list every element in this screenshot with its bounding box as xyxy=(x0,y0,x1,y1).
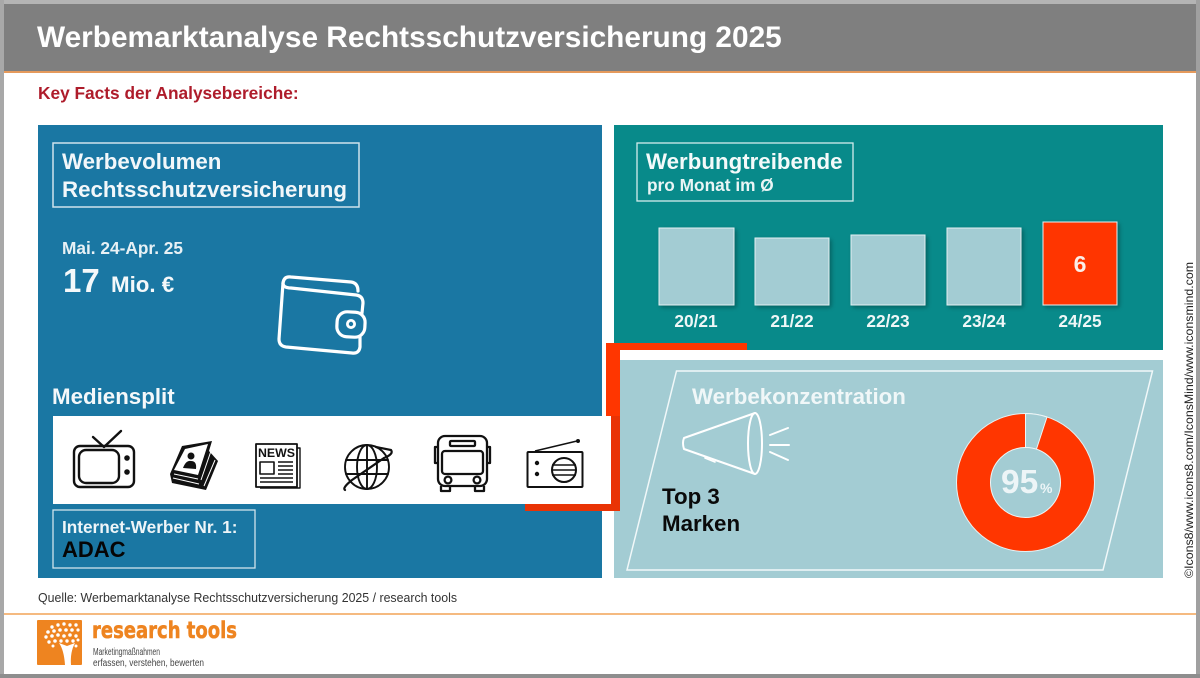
parallelogram frame xyxy=(627,371,1152,570)
icon: megaphone xyxy=(683,413,789,474)
heading: Werbekonzentration: Werbekonzentration xyxy=(692,384,906,409)
bar chart: advertisers per month: 6 xyxy=(1074,251,1086,277)
icon: newspaper: NEWS xyxy=(258,446,295,460)
logo: research tools xyxy=(37,618,237,669)
heading box: Werbevolumen xyxy=(53,143,359,207)
icon: magazine xyxy=(170,441,218,490)
value: 17 Mio. euro: 17 xyxy=(63,262,100,299)
donut chart: 95 percent xyxy=(956,414,1094,552)
icon: radio xyxy=(528,440,582,487)
heading box: Werbungtreibende: pro Monat im Ø xyxy=(647,175,774,195)
heading box: Werbevolumen: Werbevolumen xyxy=(62,149,221,174)
title bar xyxy=(4,4,1196,73)
donut chart: 95 percent: % xyxy=(1040,480,1053,496)
bar chart: advertisers per month: 23/24 xyxy=(962,311,1006,331)
footer divider xyxy=(4,613,1196,615)
icon: bus xyxy=(435,436,490,491)
credits: ©Icons8/www.icons8.com/IconsMind/www.iconsmind.com xyxy=(1182,262,1196,578)
box: Internet-Werber Nr. 1 xyxy=(53,510,255,568)
source note: Quelle: Werbemarktanalyse Rechtsschutzversicherung 2025 / research tools xyxy=(38,590,457,605)
bar chart: advertisers per month xyxy=(659,222,1117,331)
value: 17 Mio. euro: Mio. € xyxy=(111,272,175,297)
panel: Werbungtreibende xyxy=(614,125,1163,350)
red accent bracket xyxy=(525,343,747,511)
box: Internet-Werber Nr. 1: ADAC xyxy=(62,537,126,562)
heading box: Werbungtreibende xyxy=(637,143,853,201)
label: Top 3 Marken xyxy=(662,484,740,536)
tagline: erfassen, verstehen, bewerten xyxy=(93,658,204,669)
icon: wallet xyxy=(279,277,366,353)
bar chart: advertisers per month: 21/22 xyxy=(770,311,814,331)
title: Werbemarktanalyse Rechtsschutzversicherung 2025 xyxy=(37,21,782,54)
heading box: Werbevolumen: Rechtsschutzversicherung xyxy=(62,177,347,202)
white media strip xyxy=(53,416,611,504)
icon: TV xyxy=(74,431,134,487)
donut chart: 95 percent: 95 xyxy=(1001,464,1038,501)
tagline: Marketingmaßnahmen xyxy=(93,647,160,658)
icon: globe xyxy=(344,445,392,490)
bar chart: advertisers per month: 20/21 xyxy=(674,311,718,331)
heading: key facts: Key Facts der Analysebereiche: xyxy=(38,83,299,103)
bar chart: advertisers per month: 24/25 xyxy=(1058,311,1102,331)
label: Top 3 Marken: Top 3 xyxy=(662,484,720,509)
heading: Mediensplit: Mediensplit xyxy=(52,384,175,409)
bar chart: advertisers per month: 22/23 xyxy=(866,311,910,331)
box: Internet-Werber Nr. 1: Internet-Werber Nr. 1: xyxy=(62,517,237,537)
icon: newspaper xyxy=(256,444,300,488)
icon: tree logo xyxy=(37,620,82,665)
wordmark: research tools xyxy=(92,618,237,644)
label: Top 3 Marken: Marken xyxy=(662,511,740,536)
value: 17 Mio. euro xyxy=(63,262,175,299)
tagline xyxy=(93,647,204,669)
panel: Werbekonzentration xyxy=(614,360,1163,578)
heading box: Werbungtreibende: Werbungtreibende xyxy=(646,149,843,174)
panel: Werbevolumen xyxy=(38,125,602,578)
period label: Mai. 24-Apr. 25 xyxy=(62,238,183,258)
